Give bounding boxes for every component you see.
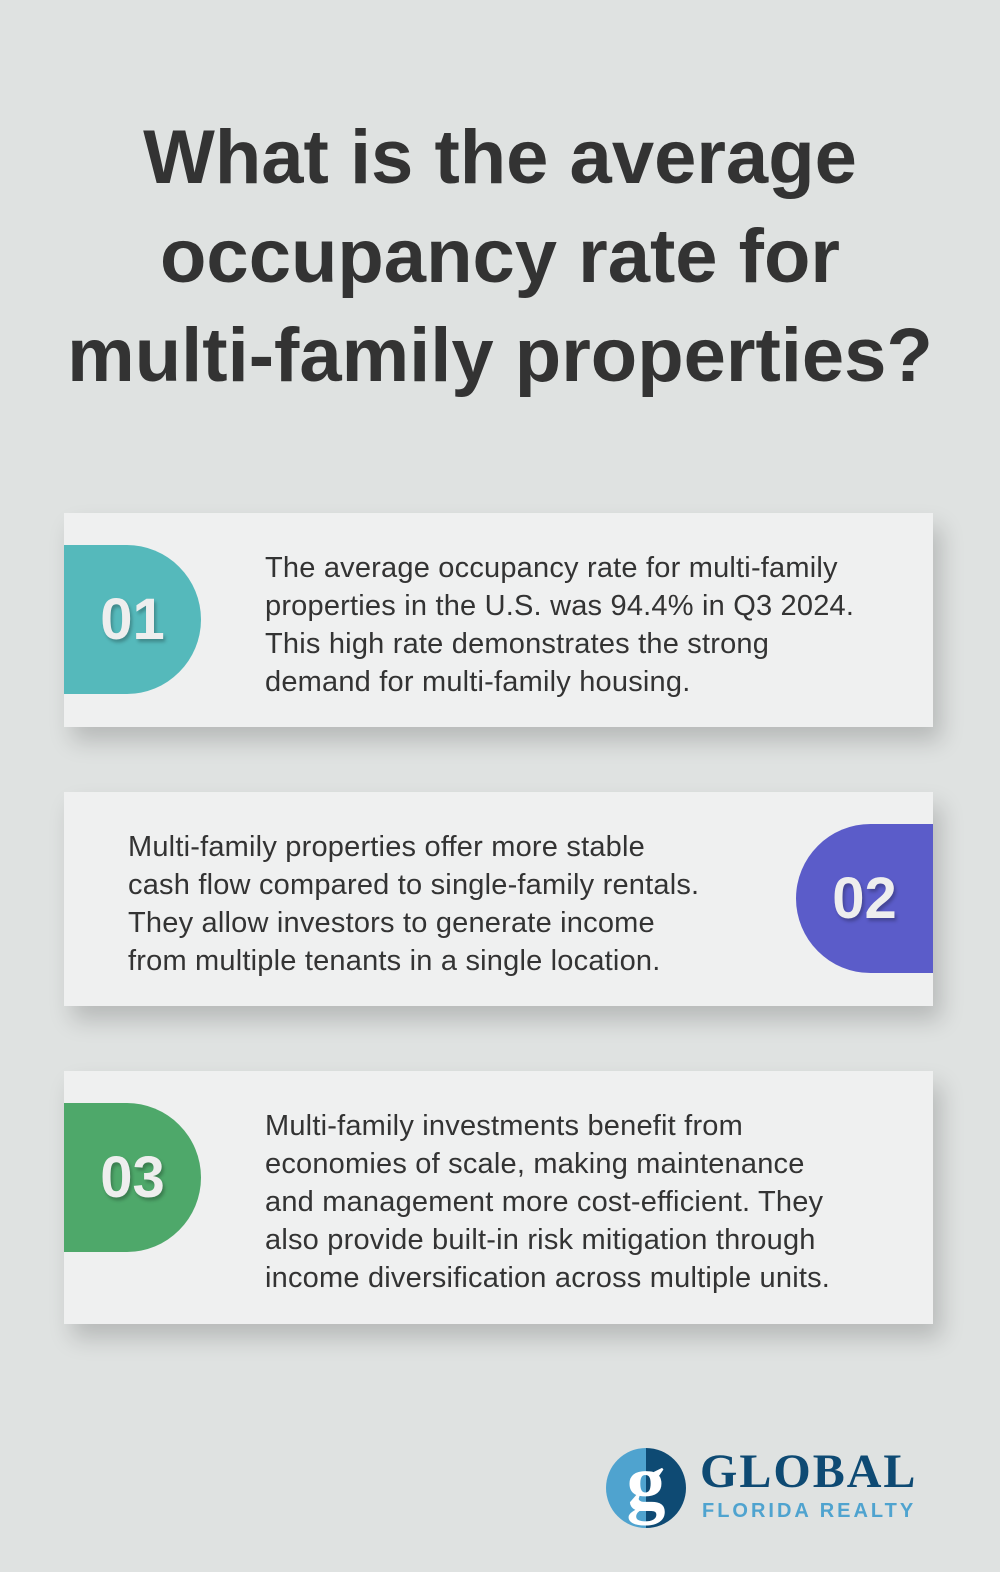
panel: card 3 xyxy=(64,1071,933,1324)
text block 3: and management more cost-efficient. They xyxy=(265,1186,823,1218)
logo xyxy=(606,1438,917,1528)
text block 1: The average occupancy rate for multi-family xyxy=(265,552,838,584)
badge: 02: 02 xyxy=(832,866,897,931)
title: multi-family properties? xyxy=(67,313,933,398)
text block 1: properties in the U.S. was 94.4% in Q3 2024. xyxy=(265,590,854,622)
title: What is the average xyxy=(143,115,857,200)
text block 2: cash flow compared to single-family rentals. xyxy=(128,869,699,901)
badge: 02 xyxy=(796,824,933,973)
text block 2: Multi-family properties offer more stable xyxy=(128,831,645,863)
text block 1 xyxy=(265,552,854,698)
logo: FLORIDA REALTY xyxy=(702,1500,916,1522)
text block 3 xyxy=(265,1110,830,1294)
icon: g circle: g xyxy=(626,1438,666,1525)
panel: card 2 xyxy=(64,792,933,1006)
badge: 01: 01 xyxy=(100,587,165,652)
text block 2: They allow investors to generate income xyxy=(128,907,655,939)
title xyxy=(67,115,933,398)
text block 1: demand for multi-family housing. xyxy=(265,666,690,698)
panel: card 1 xyxy=(64,513,933,727)
badge: 01 xyxy=(64,545,201,694)
text block 2: from multiple tenants in a single location. xyxy=(128,945,660,977)
icon: g circle xyxy=(606,1448,686,1528)
text block 3: Multi-family investments benefit from xyxy=(265,1110,743,1142)
text block 2 xyxy=(128,831,699,977)
title: occupancy rate for xyxy=(160,214,840,299)
text block 3: income diversification across multiple units. xyxy=(265,1262,830,1294)
text block 3: also provide built-in risk mitigation through xyxy=(265,1224,816,1256)
badge: 03: 03 xyxy=(100,1145,165,1210)
logo text: GLOBAL xyxy=(700,1445,917,1498)
text block 1: This high rate demonstrates the strong xyxy=(265,628,769,660)
text block 3: economies of scale, making maintenance xyxy=(265,1148,805,1180)
badge: 03 xyxy=(64,1103,201,1252)
